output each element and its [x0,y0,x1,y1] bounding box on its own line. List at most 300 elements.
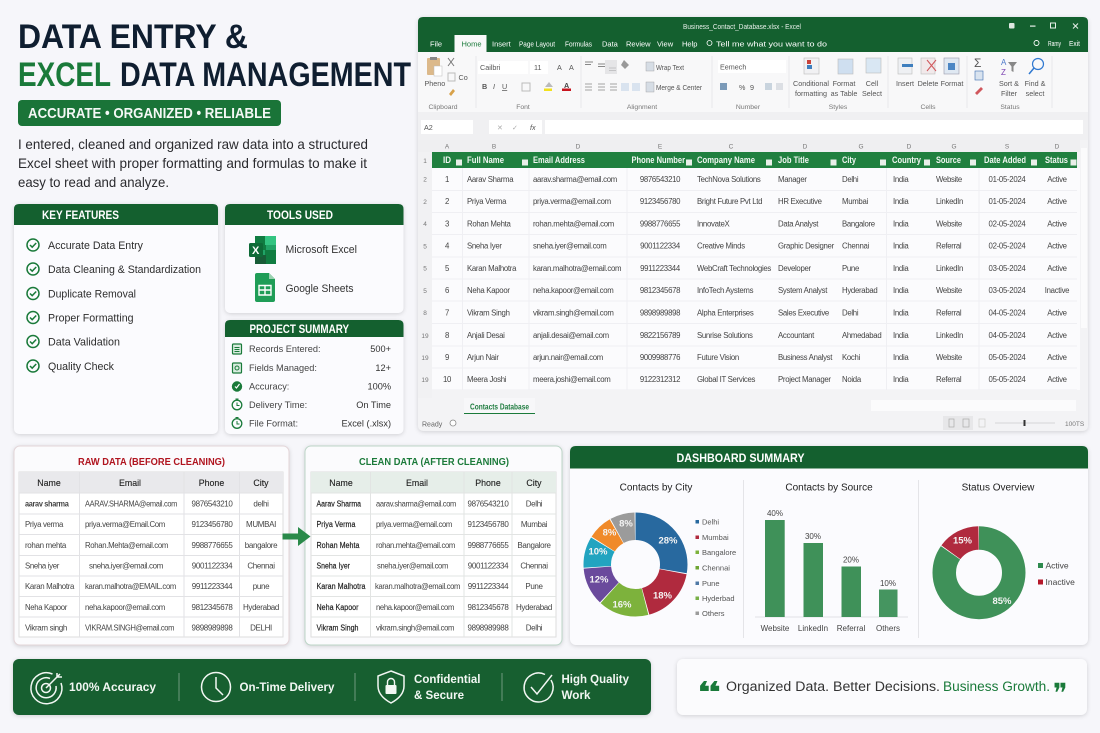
heading: project summary: PROJECT SUMMARY [250,322,349,336]
chart: contacts by city donut: 10% [588,546,608,558]
table header row: ID [443,155,451,165]
formula bar [418,112,1088,140]
ribbon tabs: Page Layout [519,40,556,48]
ribbon group: cells: Cells [920,104,936,111]
data row 5: 5 [445,264,450,273]
ribbon group: alignment: Alignment [627,104,657,111]
data row 2: 2 [445,197,449,206]
data row 6 [445,286,1069,295]
data row 8: 8 [445,331,449,340]
row numbers: 19 [421,377,429,384]
table: clean data [311,472,556,637]
data row 3 [445,220,1067,228]
data row 1: 01-05-2024 [989,175,1026,184]
chart: contacts by source bars: 40% [767,509,783,518]
data row 4: Active [1047,242,1067,250]
formula bar: A2 [424,123,433,132]
data row 10: Referral [936,375,962,384]
formula bar: ✕ [497,123,503,132]
chart: contacts by city donut: 18% [653,590,673,602]
table: raw data: Email [119,478,141,488]
chart: contacts by source bars: Contacts by Source [785,482,873,494]
data row 10: Global IT Services [697,375,756,384]
data row 2: HR Executive [778,197,822,206]
ribbon group: clipboard: Pheno [424,79,445,88]
row numbers: 8 [423,310,427,317]
data row 3: Website [936,220,962,228]
data row 6: India [893,286,909,295]
ribbon group: styles: Cell [866,79,879,88]
ribbon group: styles: Styles [829,104,848,111]
table: clean data: Rohan Mehta [316,541,360,550]
table header row: Full Name [467,155,504,165]
table: raw data: City [253,478,269,488]
data row 6: neha.kapoor@email.com [533,286,614,295]
panel: clean data after cleaning [305,446,562,645]
data row 4: Creative Minds [697,242,745,250]
data row 4: 02-05-2024 [989,242,1026,250]
data row 2: Mumbai [842,197,868,206]
data row 4: Referral [936,242,962,250]
data row 7: 9898989898 [640,308,680,318]
data row 6: 03-05-2024 [989,286,1026,295]
table header row: Phone Number [632,155,685,165]
table: clean data: Vikram Singh [316,624,358,632]
table: raw data: Hyderabad [243,603,279,612]
heading: key features: KEY FEATURES [42,208,119,222]
ribbon group: font: Font [516,104,530,111]
ribbon tabs: Data [602,40,619,48]
data row 9: Website [936,353,962,362]
data row 1: aarav.sharma@email.com [533,175,617,184]
tagline badge [18,100,281,126]
row numbers: 5 [423,288,427,295]
table header row: Source [936,155,961,165]
table: clean data: Delhi [526,624,543,632]
data row 8: 9822156789 [640,331,680,340]
data row 4: Sneha Iyer [467,242,502,250]
icon: target [31,673,62,704]
data row 2: Bright Future Pvt Ltd [697,197,762,206]
table: clean data: 9812345678 [468,603,509,612]
title: EXCEL [18,56,111,94]
data row 1 [445,175,1067,184]
table header row: Company Name [697,155,755,165]
data row 9: 9009988776 [640,353,680,362]
data row 4 [445,242,1067,250]
data row 9: arjun.nair@email.com [533,353,603,362]
ribbon group: editing: Σ [974,56,981,70]
chart: contacts by source bars [755,482,908,633]
data row 5: India [893,264,909,273]
data row 3: India [893,220,909,228]
ribbon group: styles [793,58,882,111]
table: clean data: Karan Malhotra [316,582,366,591]
data row 10: Project Manager [778,375,831,384]
data row 3: Active [1047,220,1067,228]
data row 9: Arjun Nair [467,353,499,362]
data row 5: 9911223344 [640,264,681,273]
data row 5: Pune [842,264,859,273]
feature: data cleaning: Data Cleaning & Standardization [48,264,201,276]
chart: contacts by source bars: 30% [805,532,821,541]
table: clean data: Bangalore [517,541,552,550]
benefit: high quality work [562,672,629,702]
ribbon tabs: Exit [1069,39,1081,48]
icon: quality check [524,673,553,702]
table: raw data [19,472,283,637]
chart: status overview donut: 85% [992,596,1012,607]
panel: tools used [225,204,404,313]
table: raw data: 9898989898 [192,624,233,632]
ribbon group: clipboard: Clipboard [428,104,458,111]
ribbon group: styles: formatting [795,89,827,98]
column letters: D [907,144,912,150]
legend: contacts by city: Chennai [702,564,730,572]
ribbon group: editing: Status [1000,104,1020,111]
benefit: on-time delivery: On-Time Delivery [240,680,335,694]
ribbon group: font: U [502,82,507,91]
table header row: Job Title [778,155,809,165]
legend: status overview: Active [1046,560,1069,570]
ribbon group: editing: Filter [1001,89,1018,98]
ribbon group: editing: Z [1001,68,1006,77]
data row 8: LinkedIn [936,331,963,340]
table: raw data: 9001122334 [192,562,233,570]
table: clean data: 9123456780 [468,520,509,529]
status bar [422,416,1085,430]
data row 7: 7 [445,308,449,318]
table: clean data: Neha Kapoor [316,603,359,612]
ribbon tabs: Insert [492,40,512,48]
data row 8: India [893,331,909,340]
row: delivery time: On Time [356,400,391,410]
data row 3: 02-05-2024 [989,220,1026,228]
data row 4: Chennai [842,242,870,250]
row numbers: 4 [423,221,427,228]
data row 6: Inactive [1045,286,1069,295]
ribbon group: editing: Find & [1025,79,1046,88]
table header row [432,152,1077,168]
title: DATA MANAGEMENT [120,56,411,94]
chart: contacts by city donut: 8% [619,518,633,530]
table: raw data: Priya verma [25,520,64,529]
label: google sheets: Google Sheets [286,283,354,295]
benefit: confidential and secure [414,672,480,702]
title [18,18,411,94]
data row 3: InnovateX [697,220,731,228]
benefit: confidential and secure: & Secure [414,688,464,702]
table: clean data: 9876543210 [468,500,509,508]
row: delivery time [232,399,391,410]
row: fields managed [232,363,391,373]
table: raw data: Rohan.Mehta@email.com [85,541,169,550]
data row 10: 05-05-2024 [989,375,1026,384]
panel: project summary [225,320,404,434]
table: clean data: 9898989988 [468,624,509,632]
formula bar: ✓ [512,123,518,132]
row: fields managed: Fields Managed: [249,363,317,373]
table: raw data: Karan Malhotra [25,582,75,591]
data row 3: Bangalore [842,220,875,228]
table: clean data: 9911223344 [468,582,509,591]
data row 4: 4 [445,242,450,250]
ribbon tabs: Review [626,40,651,48]
label: microsoft excel: Microsoft Excel [286,244,357,256]
row: accuracy: Accuracy: [249,382,289,392]
ribbon group: editing [974,56,1046,111]
ribbon group: font: A [564,81,569,90]
table: clean data: Hyderabad [516,603,552,612]
table header row: Status [1045,155,1068,165]
table: raw data: 9988776655 [192,541,233,550]
row numbers: 19 [421,333,429,340]
data row 9: Kochi [842,353,861,362]
icon: clock [202,672,230,702]
chart: contacts by source bars: Referral [837,624,865,633]
panel: excel window [418,17,1088,431]
ribbon group: alignment: Merge & Center [656,83,703,92]
data row 5 [445,264,1067,273]
row: records entered [232,344,391,354]
column letters: S [1005,144,1010,150]
chart: status overview donut: Status Overview [962,482,1035,494]
data row 3: Data Analyst [778,220,819,228]
data row 9: Business Analyst [778,353,833,362]
data row 5: WebCraft Technologies [697,264,771,273]
title bar [418,17,1088,52]
ribbon group: font: Cailbri [480,63,501,72]
status bar: Ready [422,422,443,428]
ribbon group: font: A [569,63,574,72]
data row 8: anjali.desai@email.com [533,331,609,340]
chart: contacts by city donut: 12% [589,574,609,586]
data row 10: Active [1047,375,1067,384]
feature: accurate data entry: Accurate Data Entry [48,240,143,252]
data row 1: 9876543210 [640,175,681,184]
title: DATA ENTRY & [18,18,248,56]
data row 6: Neha Kapoor [467,286,510,295]
ribbon group: number: 9 [750,83,754,92]
data row 9: 9 [445,353,449,362]
table: clean data: Aarav Sharma [316,500,361,508]
arrow: raw to clean [282,527,310,546]
ribbon tabs: Home [462,40,482,48]
ribbon group: cells: Format [941,79,963,88]
data row 8: 04-05-2024 [989,331,1026,340]
legend: contacts by city: Bangalore [702,548,736,557]
chart: contacts by source bars: LinkedIn [798,624,828,633]
legend: contacts by city: Hyderbad [702,594,735,603]
quote text: Business Growth. [943,679,1050,694]
data row 8: Sunrise Solutions [697,331,753,340]
table: raw data: pune [253,582,270,591]
data row 8 [445,331,1067,340]
table: raw data: Chennai [247,562,275,570]
table: raw data: Sneha iyer [25,562,60,570]
table header row: City [842,155,856,165]
legend: status overview: Inactive [1046,577,1075,587]
feature: duplicate removal: Duplicate Removal [48,288,136,300]
ribbon group: cells: Insert [896,79,914,88]
table: clean data: Phone [475,478,501,488]
chart: contacts by city donut: Contacts by City [620,482,692,494]
table: raw data: AARAV.SHARMA@email.com [85,500,178,508]
table: clean data: neha.kapoor@email.com [376,603,455,612]
table: clean data: aarav.sharma@email.com [376,500,457,508]
benefit: accuracy: 100% Accuracy [69,680,156,694]
table: clean data: City [526,478,542,488]
sheet tab [464,398,535,414]
data row 8: Active [1047,331,1067,340]
table: raw data: rohan mehta [25,541,67,550]
ribbon group: editing: A [1001,58,1007,67]
data row 1: TechNova Solutions [697,175,761,184]
column letters: A [445,144,450,150]
column letters: B [492,144,496,150]
table: raw data: neha.kapoor@email.com [85,603,166,612]
data row 7: Alpha Enterprises [697,308,754,318]
panel: raw data before cleaning [14,446,289,645]
table: raw data: Name [37,478,61,488]
intro paragraph [18,136,368,190]
ribbon [418,52,1088,112]
table: clean data: Priya Verma [316,520,356,529]
data row 8: Accountant [778,331,815,340]
table: raw data: priya.verma@Email.Com [85,520,166,529]
data row 6: System Analyst [778,286,828,295]
table: raw data: DELHI [250,624,272,632]
chart: status overview donut [944,482,1035,607]
data row 10: India [893,375,909,384]
table: clean data: Pune [525,582,544,591]
data row 2: LinkedIn [936,197,963,206]
ribbon tabs: File [430,40,442,48]
benefit: high quality work: Work [562,688,591,702]
data row 2: priya.verma@email.com [533,197,611,206]
row: file format: Excel (.xlsx) [341,418,391,428]
ribbon group: clipboard [424,57,468,111]
chart: contacts by city donut: 16% [612,600,632,610]
scrollbars [871,140,1088,411]
row numbers [421,158,429,384]
heading: raw data: RAW DATA (BEFORE CLEANING) [78,457,225,468]
data row 10: Meera Joshi [467,375,507,384]
table: clean data: Delhi [526,500,543,508]
data row 6: Website [936,286,962,295]
ribbon group: styles: as Table [831,89,857,98]
ribbon group: font: I [493,82,495,91]
table: raw data: aarav sharma [25,500,69,508]
benefit: confidential and secure: Confidential [414,672,480,686]
row: accuracy: 100% [368,382,391,392]
status bar: 100TS [1065,421,1085,428]
data row 1: Website [936,175,962,184]
data row 4: India [893,242,909,250]
data row 1: Delhi [842,175,859,184]
table: raw data: sneha.iyer@email.com [89,562,164,570]
data row 7: Vikram Singh [467,308,510,318]
data row 5: LinkedIn [936,264,963,273]
legend: status overview [1038,560,1075,587]
title bar: Business_Contact_Database.xlsx - Excel [683,22,801,31]
ribbon group: clipboard: Co [458,73,468,82]
table: raw data: 9812345678 [192,603,233,612]
data row 2 [445,197,1067,206]
tagline badge: ACCURATE • ORGANIZED • RELIABLE [28,105,271,122]
row: file format: File Format: [249,418,298,428]
table: clean data: rohan.mehta@email.com [376,541,456,550]
data row 4: Graphic Designer [778,242,835,250]
table: raw data: karan.malhotra@EMAIL.com [85,582,177,591]
panel: benefits band [13,659,651,715]
benefit: high quality work: High Quality [562,672,629,686]
column letters [418,140,1088,152]
table: clean data: vikram.singh@email.com [376,624,455,632]
intro paragraph: Excel sheet with proper formatting and formulas to make it [18,155,367,171]
sheet tab: Contacts Database [470,402,530,412]
row numbers: 2 [423,176,427,184]
ribbon group: alignment: Wrap Text [656,63,684,72]
row: records entered: 500+ [370,344,391,354]
data row 6: InfoTech Aystems [697,286,754,295]
data row 7: Delhi [842,308,859,318]
ribbon tabs: View [657,40,674,48]
ribbon group: styles: Format [833,79,855,88]
quote text: Organized Data. Better Decisions. [726,679,940,694]
ribbon group: font: B [482,82,487,91]
feature: proper formatting: Proper Formatting [48,312,134,324]
ribbon group: font [478,61,574,111]
data row 7: vikram.singh@email.com [533,308,614,318]
ribbon tabs: Formulas [565,40,592,48]
data row 5: karan.malhotra@email.com [533,264,621,273]
chart: contacts by source bars: Others [876,624,900,633]
feature: quality check [27,360,114,373]
table: clean data: karan.malhotra@email.com [375,582,461,591]
ribbon group: styles: Select [862,89,882,98]
data row 9 [445,353,1067,362]
chart: contacts by source bars: 10% [880,579,896,588]
row: records entered: Records Entered: [249,344,320,354]
ribbon group: editing: Sort & [999,79,1019,88]
data row 7: Active [1047,308,1067,318]
heading: dashboard summary: DASHBOARD SUMMARY [676,451,804,465]
table: raw data: 9123456780 [192,520,233,529]
data row 1: Active [1047,175,1067,184]
data row 7: 04-05-2024 [989,308,1026,318]
data row 1: Aarav Sharma [467,175,514,184]
ribbon tabs: Tell me what you want to do [716,40,827,48]
column letters: D [803,144,808,150]
column letters: E [658,144,663,150]
table: raw data: 9876543210 [192,500,233,508]
row: fields managed: 12+ [375,363,391,373]
chart: contacts by city donut: 28% [658,536,678,546]
ribbon group: number: Number [736,104,761,111]
data row 5: Developer [778,264,812,273]
ribbon tabs: Ramy [1048,39,1061,48]
chart: status overview donut: 15% [953,536,973,546]
table: raw data: Neha Kapoor [25,603,68,612]
table: raw data: VIKRAM.SINGH@email.com [85,624,175,632]
chart: contacts by source bars: Website [761,624,790,633]
chart: contacts by city donut [588,482,692,610]
panel: quote [677,659,1087,715]
table: clean data: Mumbai [521,520,548,529]
data row 7: India [893,308,909,318]
data row 3: rohan.mehta@email.com [533,220,614,228]
